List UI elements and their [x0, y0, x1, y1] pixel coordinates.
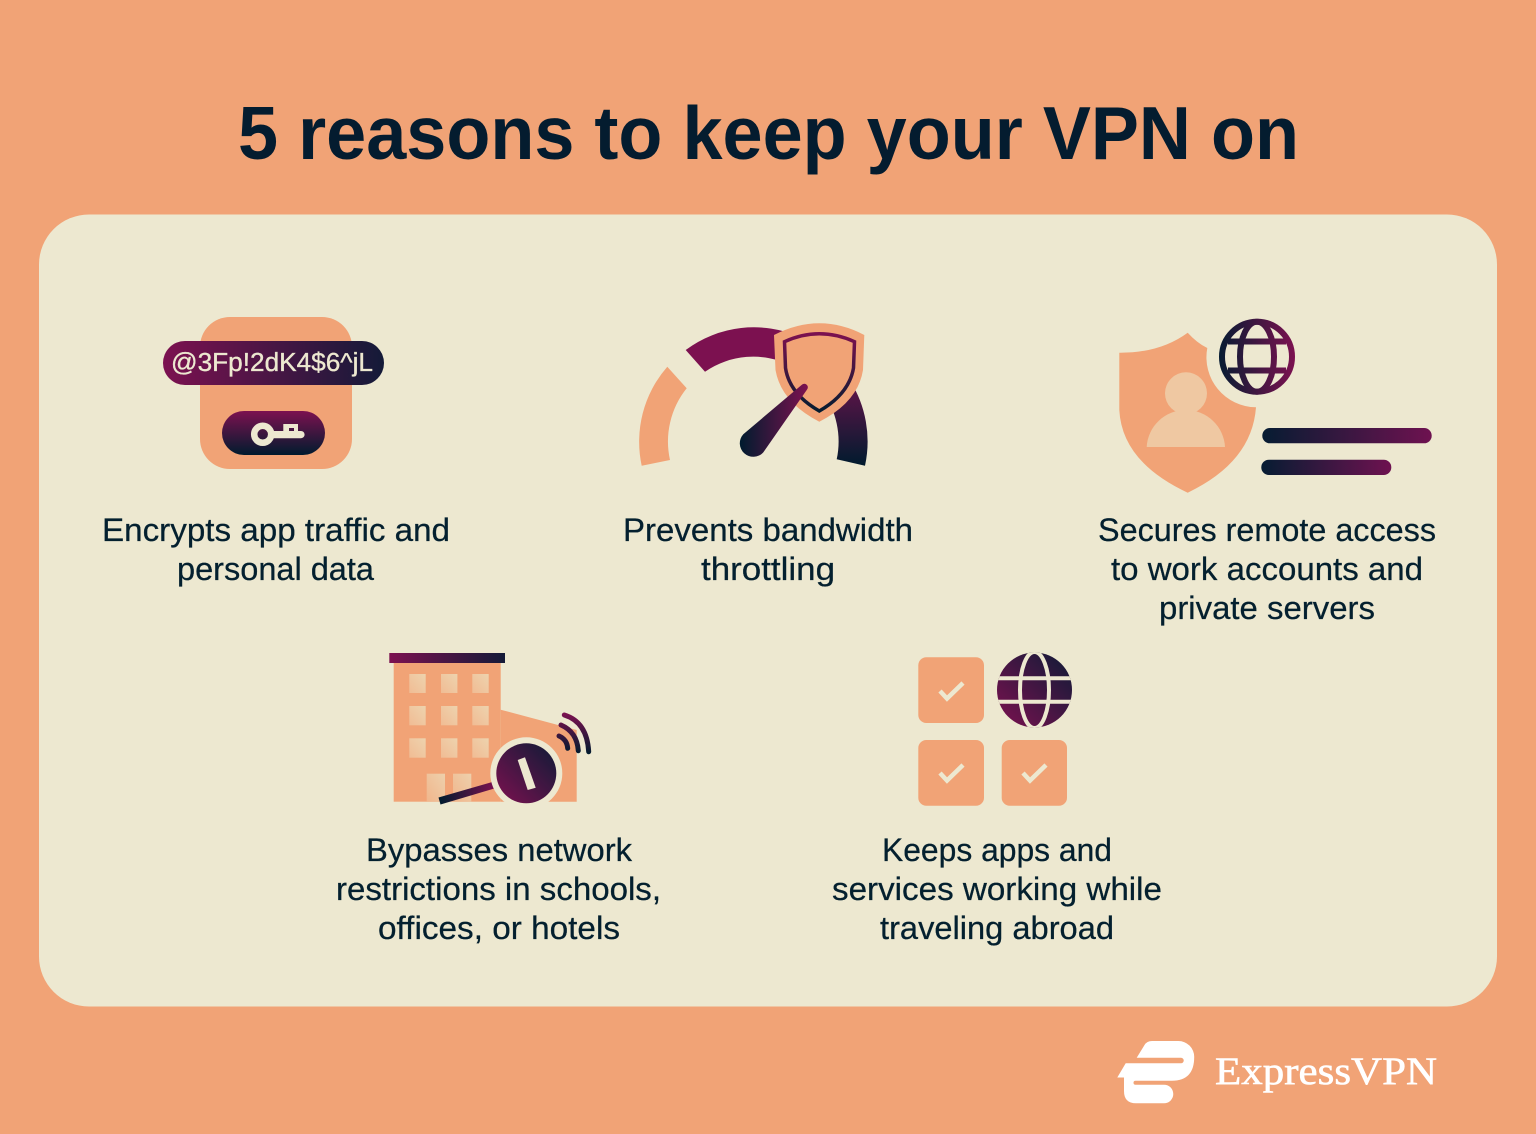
text: reason 4: Bypasses network: [366, 832, 633, 868]
icon: shield with user and globe: [1119, 322, 1432, 493]
text: reason 5: [832, 832, 1162, 946]
password pill: @3Fp!2dK4$6^jL: [171, 349, 373, 377]
text: reason 3: private servers: [1159, 590, 1375, 626]
text: reason 2: throttling: [701, 551, 835, 587]
text: reason 5: services working while: [832, 871, 1162, 907]
text: reason 1: personal data: [177, 551, 374, 587]
password pill: [163, 341, 384, 385]
text: reason 3: to work accounts and: [1111, 551, 1423, 587]
text: reason 3: [1098, 512, 1436, 626]
text: reason 3: Secures remote access: [1098, 512, 1436, 548]
key pill: [222, 411, 325, 455]
text: reason 2: Prevents bandwidth: [623, 512, 913, 548]
text: reason 2: [623, 512, 913, 587]
icon: encrypted password and key: [163, 317, 384, 469]
text: reason 1: [102, 512, 450, 587]
title: 5 reasons to keep your VPN on: [238, 91, 1299, 175]
text: reason 1: Encrypts app traffic and: [102, 512, 450, 548]
icon: speed gauge with shield: [639, 323, 868, 466]
logo: ExpressVPN: [1117, 1041, 1437, 1103]
globe: [995, 652, 1074, 728]
text: reason 4: restrictions in schools,: [336, 871, 661, 907]
text: reason 4: [336, 832, 661, 946]
globe: [1222, 322, 1292, 392]
text: reason 4: offices, or hotels: [378, 910, 620, 946]
magnifier: [490, 737, 562, 809]
text: reason 5: Keeps apps and: [882, 832, 1112, 868]
wifi arcs: [559, 715, 589, 752]
icon: building with magnifier and wifi: [389, 653, 589, 809]
logo: ExpressVPN: ExpressVPN: [1215, 1050, 1437, 1093]
panel: reasons: [39, 214, 1497, 1006]
text: reason 5: traveling abroad: [880, 910, 1114, 946]
icon: checked apps and globe: [918, 652, 1074, 806]
